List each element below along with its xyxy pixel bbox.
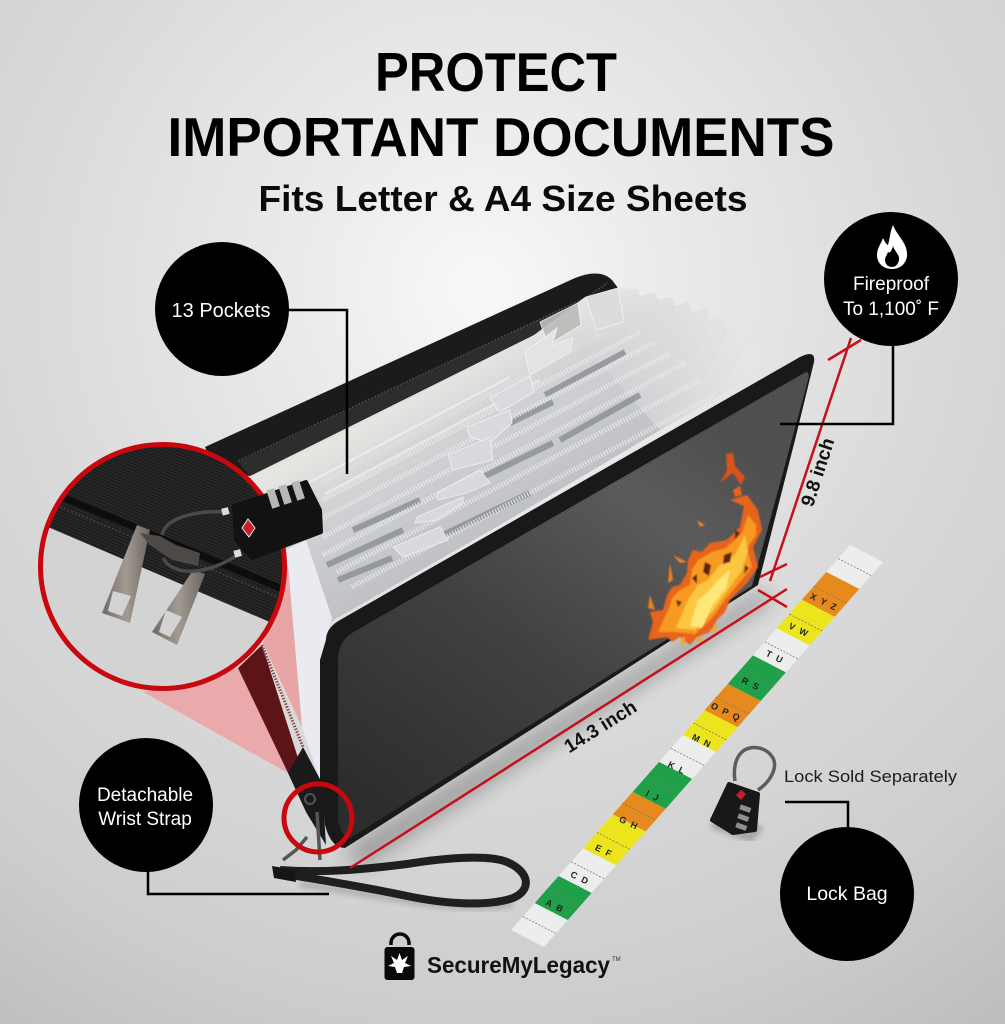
callout: lock bag: Lock Bag	[806, 883, 888, 905]
dark gaps between pockets	[327, 352, 640, 580]
strip tab letters: T U	[764, 648, 786, 666]
zoom circle: zippers and combination lock	[30, 430, 321, 688]
strip tab letters	[544, 591, 840, 915]
logo: SecureMyLegacy	[427, 952, 610, 978]
back streaks	[300, 377, 540, 494]
strip tab letters: K L	[666, 759, 688, 777]
strap metal clasp	[283, 812, 320, 860]
subtitle: Fits Letter & A4 Size Sheets	[258, 178, 748, 219]
zipper pull two	[152, 570, 205, 645]
spine with zipper	[238, 645, 326, 845]
strip tab letters: X Y Z	[808, 591, 840, 613]
logo: TM	[612, 957, 621, 963]
label: 9.8 inch: 9.8 inch	[798, 436, 839, 509]
callout: fireproof	[780, 212, 958, 424]
pleats fading toward the right	[560, 288, 782, 430]
title: PROTECT	[375, 41, 617, 103]
pocket ribs	[323, 332, 715, 587]
index label strip	[511, 545, 883, 947]
strip tab letters: R S	[740, 675, 762, 693]
icon: travel padlock	[712, 748, 775, 838]
strip tab letters: E F	[593, 842, 615, 860]
lock cable	[162, 512, 240, 571]
callout: detachable wrist strap: Wrist Strap	[98, 809, 192, 830]
title	[168, 41, 834, 168]
red projection cone from zoom circle	[143, 668, 288, 773]
zipper band	[50, 447, 282, 622]
strip tab letters: G H	[618, 814, 640, 832]
small red circle on strap attachment	[284, 784, 352, 852]
title: IMPORTANT DOCUMENTS	[168, 106, 834, 168]
product: expanding fireproof file folder	[143, 273, 814, 868]
combination lock	[221, 480, 321, 558]
callout: detachable wrist strap	[79, 738, 329, 894]
icon: white flame	[877, 225, 907, 269]
strip tab letters: O P Q	[709, 700, 743, 724]
callout: detachable wrist strap: Detachable	[97, 785, 193, 806]
front cover	[320, 354, 814, 848]
flames on cover	[648, 453, 762, 648]
label: 14.3 inch: 14.3 inch	[561, 697, 641, 758]
white pocket side	[286, 540, 332, 786]
logo	[384, 934, 621, 980]
strip tab letters: I J	[644, 788, 662, 804]
wrist strap	[272, 794, 526, 907]
callout: fireproof: Fireproof	[853, 274, 930, 295]
back flap of folder	[205, 273, 618, 477]
translucent pockets with pleated edge	[250, 288, 782, 650]
zipper pull one	[102, 525, 150, 623]
callout: fireproof: To 1,100˚ F	[843, 299, 939, 320]
strip tab letters: C D	[569, 869, 591, 887]
callout: 13 pockets: 13 Pockets	[172, 300, 270, 322]
pink tint on side pocket	[263, 565, 302, 727]
ground shadow under folder	[345, 590, 775, 868]
zipper links	[140, 533, 200, 566]
red dimension: length	[350, 589, 787, 868]
text: lock sold separately: Lock Sold Separately	[784, 768, 958, 786]
callout: 13 pockets	[155, 242, 347, 474]
red dimension: height	[760, 338, 861, 581]
logo padlock icon	[384, 934, 414, 980]
strip tab letters: M N	[690, 732, 714, 750]
strip tab letters: V W	[787, 621, 811, 639]
callout: lock bag	[780, 802, 914, 961]
pocket index tabs	[393, 288, 624, 557]
strip tab letters: A B	[544, 897, 566, 915]
